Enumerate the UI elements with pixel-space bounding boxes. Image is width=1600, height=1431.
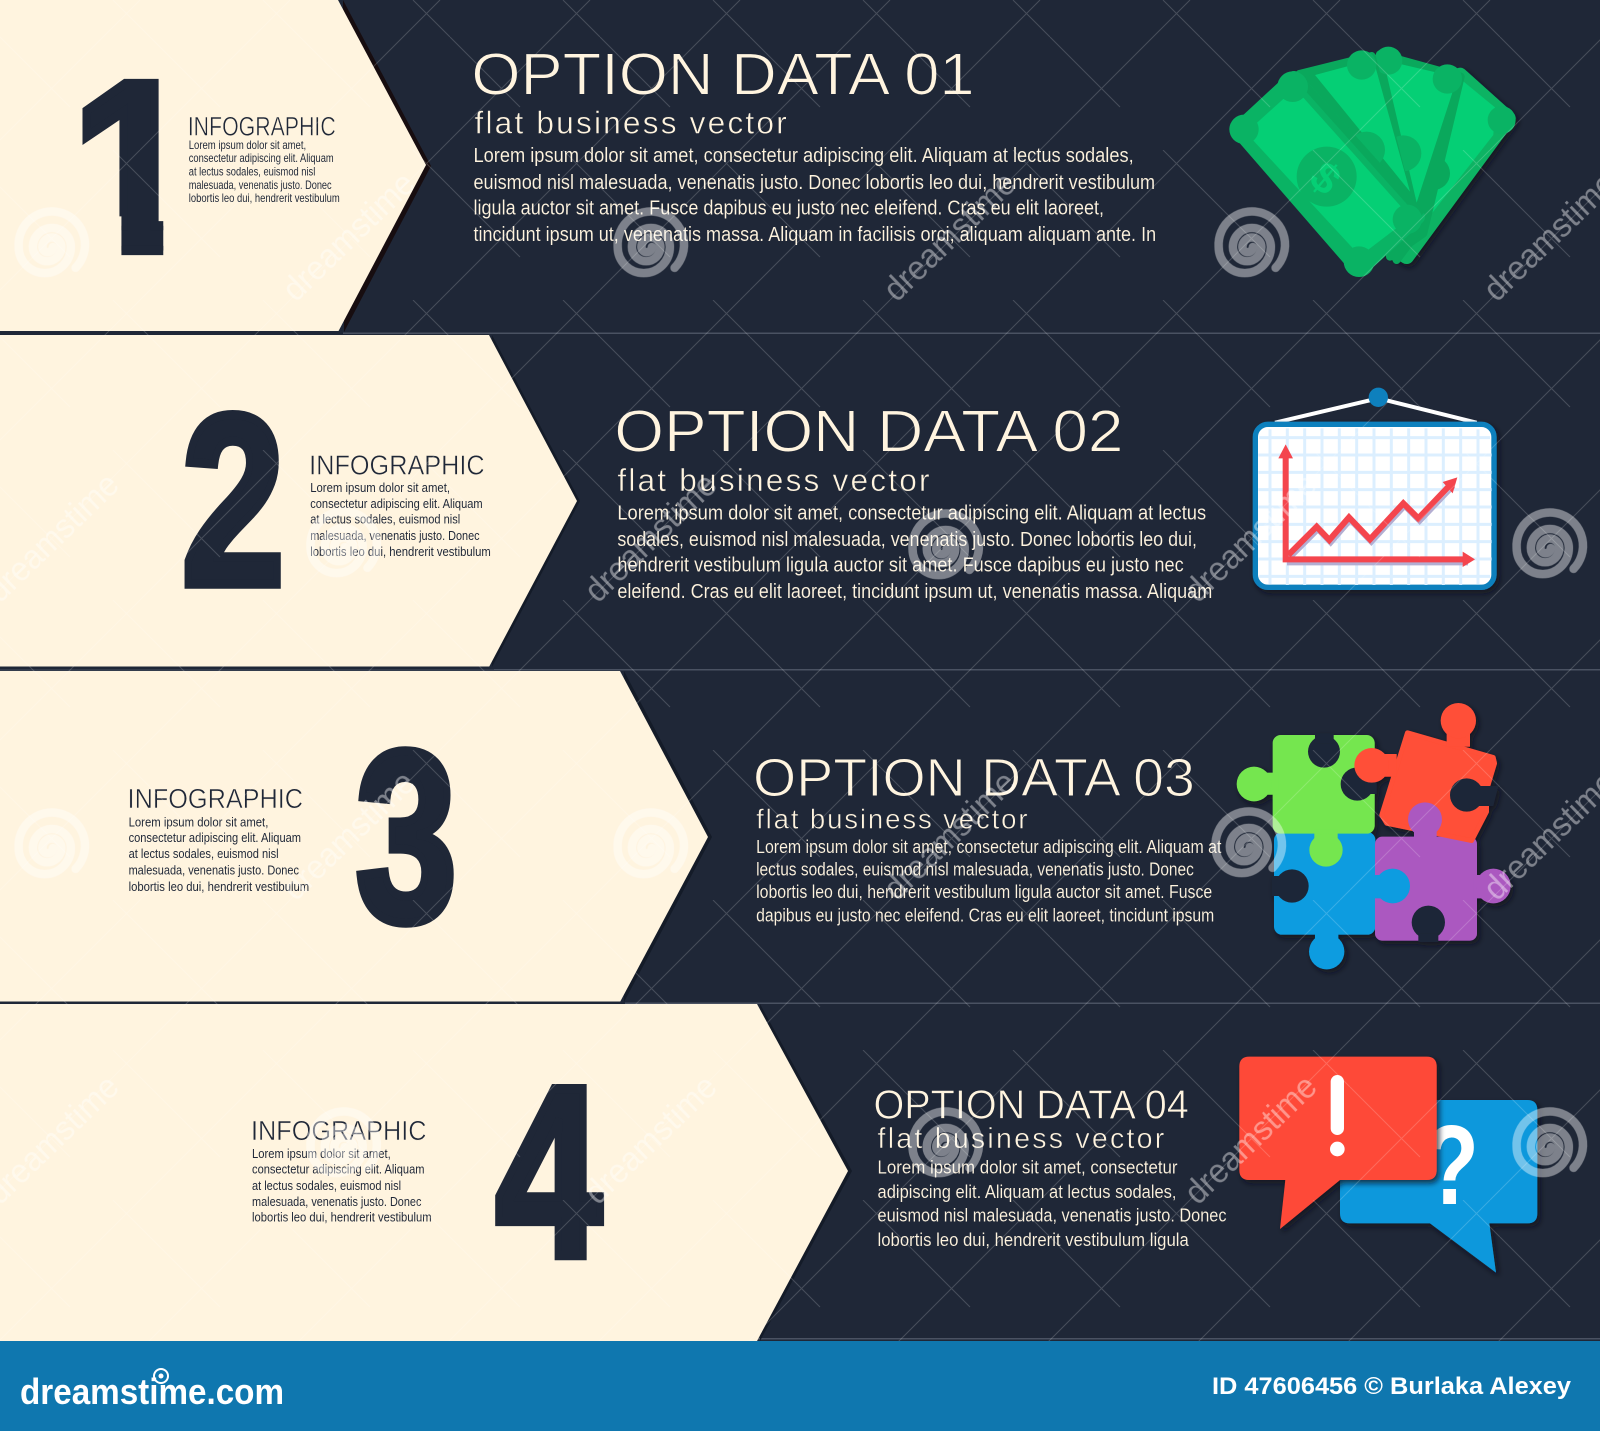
- watermark text: [0, 165, 1600, 1212]
- body text 2: [617, 502, 1212, 603]
- caption block 4: lobortis leo dui, hendrerit vestibulum: [252, 1209, 432, 1224]
- caption block 3: at lectus sodales, euismod nisl: [129, 846, 279, 861]
- caption block 4: malesuada, venenatis justo. Donec: [252, 1194, 422, 1209]
- icon: speech bubbles: [1239, 1057, 1537, 1273]
- caption block 4: Lorem ipsum dolor sit amet,: [252, 1146, 391, 1161]
- caption block 3: Lorem ipsum dolor sit amet,: [129, 815, 268, 830]
- watermark text: dreamstime: [275, 764, 423, 908]
- body text 3: Lorem ipsum dolor sit amet, consectetur adipiscing elit. Aliquam at: [756, 836, 1221, 857]
- heading: option data 02: flat business vector: [617, 462, 930, 498]
- caption block 4: INFOGRAPHIC: [251, 1115, 427, 1146]
- caption block 3: INFOGRAPHIC: [128, 783, 303, 814]
- watermark text: dreamstime: [1177, 466, 1325, 610]
- puzzle piece: purple: [1375, 837, 1511, 942]
- heading: option data 01: OPTION DATA 01: [471, 40, 974, 107]
- heading: option data 04: flat business vector: [878, 1123, 1165, 1155]
- puzzle piece: red: [1354, 703, 1498, 841]
- caption block 4: [251, 1115, 432, 1224]
- caption block 1: consectetur adipiscing elit. Aliquam: [189, 151, 334, 165]
- caption block 1: INFOGRAPHIC: [188, 112, 336, 142]
- body text 2: hendrerit vestibulum ligula auctor sit amet. Fusce dapibus eu justo nec: [617, 554, 1184, 576]
- caption block 1: malesuada, venenatis justo. Donec: [189, 178, 332, 192]
- icon: chart board: [1255, 388, 1494, 587]
- body text 3: lobortis leo dui, hendrerit vestibulum ligula auctor sit amet. Fusce: [756, 881, 1212, 902]
- body text 4: euismod nisl malesuada, venenatis justo. Donec: [878, 1204, 1227, 1225]
- body text 1: Lorem ipsum dolor sit amet, consectetur adipiscing elit. Aliquam at lectus sodales,: [473, 145, 1134, 167]
- numeral 4: 4: [496, 1037, 602, 1308]
- footer logo: dreamstime.com: [20, 1371, 284, 1412]
- numeral 1: 1: [71, 32, 196, 303]
- bubble: question: ?: [1424, 1102, 1479, 1229]
- puzzle knob: blue: [1373, 869, 1410, 903]
- caption block 4: consectetur adipiscing elit. Aliquam: [252, 1161, 424, 1176]
- caption block 1: [188, 112, 340, 205]
- caption block 3: consectetur adipiscing elit. Aliquam: [129, 830, 301, 845]
- caption block 2: Lorem ipsum dolor sit amet,: [310, 480, 450, 495]
- caption block 4: at lectus sodales, euismod nisl: [252, 1178, 401, 1193]
- heading: option data 02: [614, 398, 1123, 498]
- caption block 3: malesuada, venenatis justo. Donec: [129, 862, 299, 877]
- panel 3: cream arrow: [0, 671, 712, 1004]
- puzzle knob: purple: [1408, 802, 1442, 840]
- panel 4: cream arrow: [0, 1004, 852, 1341]
- caption block 3: [128, 783, 309, 894]
- body text 2: sodales, euismod nisl malesuada, venenatis justo. Donec lobortis leo dui,: [617, 529, 1197, 551]
- icon: fan of banknotes: [1229, 47, 1516, 277]
- heading: option data 01: [471, 40, 974, 141]
- bubble: exclamation: [1239, 1057, 1437, 1229]
- caption block 2: lobortis leo dui, hendrerit vestibulum: [310, 544, 491, 559]
- watermark text: dreamstime: [577, 1068, 725, 1212]
- body text 3: dapibus eu justo nec eleifend. Cras eu elit laoreet, tincidunt ipsum: [756, 904, 1214, 925]
- bubble: question: [1340, 1100, 1537, 1273]
- body text 3: [756, 836, 1221, 925]
- body text 4: [878, 1156, 1227, 1250]
- band separators: [0, 332, 1600, 1340]
- caption block 1: lobortis leo dui, hendrerit vestibulum: [189, 191, 340, 205]
- watermark text: dreamstime: [275, 165, 423, 309]
- icon: jigsaw puzzle: [1237, 703, 1511, 969]
- heading: option data 02: OPTION DATA 02: [614, 398, 1123, 465]
- body text 1: [473, 145, 1156, 246]
- body text 3: lectus sodales, euismod nisl malesuada, venenatis justo. Donec: [756, 859, 1194, 880]
- caption block 2: malesuada, venenatis justo. Donec: [310, 528, 480, 543]
- body text 2: Lorem ipsum dolor sit amet, consectetur adipiscing elit. Aliquam at lectus: [617, 502, 1206, 524]
- body text 1: ligula auctor sit amet. Fusce dapibus eu justo nec eleifend. Cras eu elit laoreet,: [473, 197, 1104, 219]
- heading: option data 01: flat business vector: [474, 105, 787, 141]
- caption block 1: at lectus sodales, euismod nisl: [189, 165, 315, 179]
- panel 1: cream arrow: [0, 0, 431, 334]
- heading: option data 03: [753, 748, 1195, 835]
- watermark text: dreamstime: [1177, 1068, 1325, 1212]
- caption block 2: at lectus sodales, euismod nisl: [310, 511, 460, 526]
- puzzle piece: green: [1237, 733, 1377, 867]
- watermark text: dreamstime: [876, 165, 1024, 309]
- caption block 2: [309, 449, 491, 559]
- watermark text: dreamstime: [876, 764, 1024, 908]
- footer credit: ID 47606456 © Burlaka Alexey: [1212, 1373, 1572, 1400]
- body text 1: euismod nisl malesuada, venenatis justo. Donec lobortis leo dui, hendrerit vestibulum: [473, 172, 1155, 194]
- puzzle piece: blue: [1272, 832, 1375, 969]
- caption block 2: INFOGRAPHIC: [309, 449, 485, 480]
- body text 4: adipiscing elit. Aliquam at lectus sodales,: [878, 1181, 1177, 1202]
- numeral 3: 3: [356, 701, 457, 972]
- icon: fan of banknotes: $: [1300, 153, 1350, 205]
- footer bar: [0, 1341, 1600, 1431]
- body text 1: tincidunt ipsum ut, venenatis massa. Aliquam in facilisis orci, aliquam aliquam ante. In: [473, 224, 1156, 246]
- body text 2: eleifend. Cras eu elit laoreet, tincidunt ipsum ut, venenatis massa. Aliquam: [617, 581, 1212, 603]
- watermark spirals: [19, 211, 1583, 1173]
- numeral 2: 2: [182, 365, 285, 636]
- body text 4: Lorem ipsum dolor sit amet, consectetur: [878, 1156, 1178, 1177]
- heading: option data 03: flat business vector: [756, 804, 1028, 835]
- watermark text: dreamstime: [577, 466, 725, 610]
- body text 4: lobortis leo dui, hendrerit vestibulum ligula: [878, 1229, 1189, 1250]
- heading: option data 03: OPTION DATA 03: [753, 748, 1195, 808]
- panel 2: cream arrow: [0, 335, 580, 670]
- heading: option data 04: OPTION DATA 04: [873, 1081, 1189, 1127]
- heading: option data 04: [873, 1081, 1189, 1155]
- caption block 1: Lorem ipsum dolor sit amet,: [189, 138, 306, 152]
- caption block 2: consectetur adipiscing elit. Aliquam: [310, 496, 483, 511]
- caption block 3: lobortis leo dui, hendrerit vestibulum: [129, 879, 309, 894]
